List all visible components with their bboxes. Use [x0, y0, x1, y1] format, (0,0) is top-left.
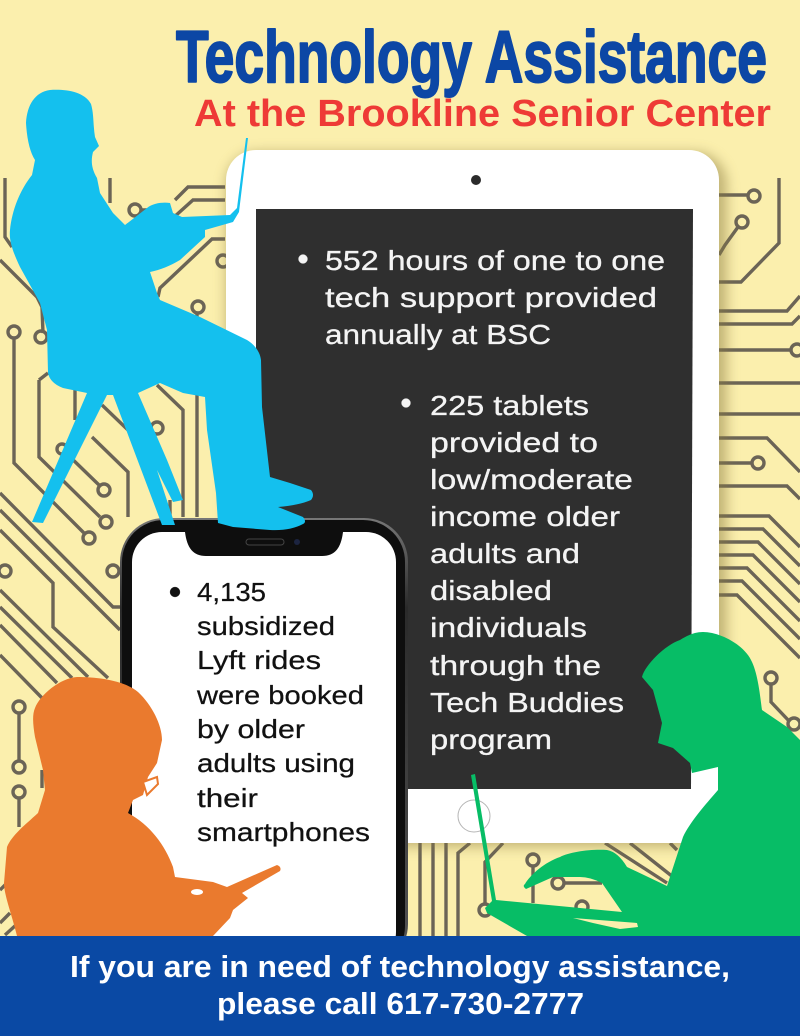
text block: tech support hours: tech support provided [325, 282, 657, 313]
text block: tablets: 225 tablets [430, 390, 589, 421]
text block: tech support hours: annually at BSC [325, 319, 551, 350]
circuit board background [0, 178, 800, 936]
text block: tablets: income older [430, 501, 620, 532]
text block: tablets: adults and [430, 538, 580, 569]
text block: Lyft rides: 4,135 [197, 577, 266, 607]
text block: tablets: low/moderate [430, 464, 633, 495]
text block: tablets: individuals [430, 612, 587, 643]
tablet device [226, 150, 727, 847]
text block: Lyft rides: were booked [196, 680, 364, 710]
text block: tech support hours: 552 hours of one to one [325, 245, 665, 276]
icon: blue silhouette of man on stool with laptop [10, 90, 313, 530]
text block: tablets: disabled [430, 575, 552, 606]
call to action banner [0, 936, 800, 1036]
text block: Lyft rides [170, 577, 370, 847]
text block: tablets: Tech Buddies [430, 687, 624, 718]
text block: tablets [402, 390, 633, 755]
text block: tablets: through the [430, 650, 601, 681]
text block: Lyft rides: their [197, 783, 258, 813]
text block: Lyft rides: adults using [197, 748, 355, 778]
subtitle: At the Brookline Senior Center [194, 93, 771, 135]
text block: Lyft rides: smartphones [197, 817, 370, 847]
call to action banner: please call 617-730-2777 [217, 986, 584, 1021]
text block: Lyft rides: by older [197, 714, 305, 744]
text block: tablets: provided to [430, 427, 598, 458]
icon: green silhouette of person typing on laptop [471, 632, 800, 936]
icon: orange silhouette of older adult with smartphone [4, 677, 281, 936]
text block: tablets: program [430, 724, 552, 755]
call to action banner: If you are in need of technology assistance, [70, 949, 730, 984]
text block: tech support hours [298, 245, 665, 350]
text block: Lyft rides: subsidized [197, 611, 335, 641]
smartphone device [120, 518, 408, 968]
text block: Lyft rides: Lyft rides [197, 645, 321, 675]
